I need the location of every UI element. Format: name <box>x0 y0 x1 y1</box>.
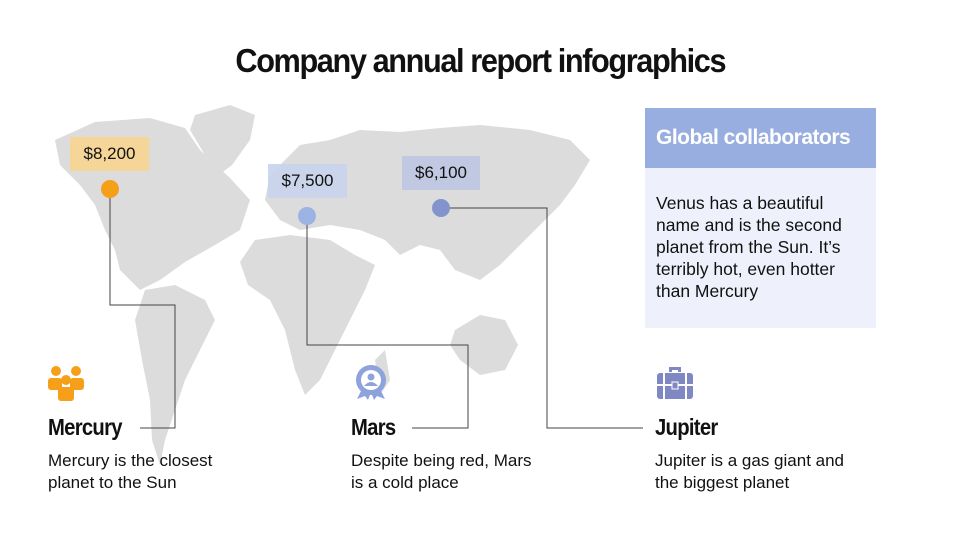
icon: briefcase <box>657 367 693 399</box>
title: Company annual report infographics <box>235 42 725 79</box>
heading: Mercury: Mercury <box>48 414 122 440</box>
icon: people <box>48 366 84 401</box>
text: Jupiter: Jupiter is a gas giant and the biggest planet <box>655 451 844 492</box>
text: $7,500 <box>282 171 334 190</box>
value tags <box>70 137 149 171</box>
panel: global collaborators: Venus has a beautiful name and is the second planet from the Sun. It’s terribly hot, even hotter than Mercury <box>656 193 842 301</box>
panel: global collaborators <box>645 108 876 328</box>
icon: badge <box>356 365 386 400</box>
text: $6,100 <box>415 163 467 182</box>
text: Mercury: Mercury is the closest planet to the Sun <box>48 451 212 492</box>
panel: global collaborators: Global collaborators <box>656 126 850 149</box>
heading: Mars: Mars <box>351 414 395 440</box>
dots <box>101 180 450 225</box>
heading: Jupiter: Jupiter <box>655 414 718 440</box>
text: Mars: Despite being red, Mars is a cold place <box>351 451 531 492</box>
value tags: $8,200 <box>84 144 136 163</box>
